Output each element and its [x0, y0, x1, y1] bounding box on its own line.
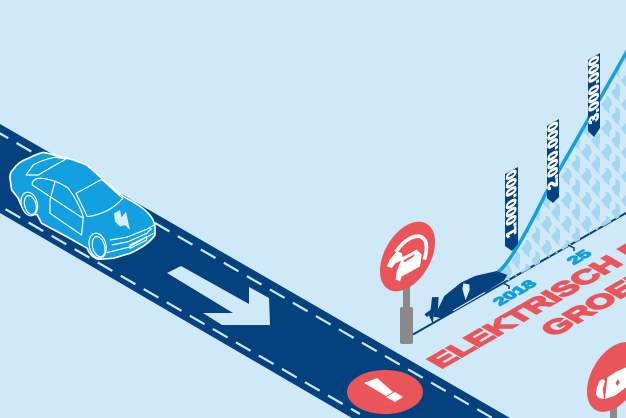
road [0, 124, 520, 418]
flag: 2.000.000: 2.000.000 [545, 118, 561, 193]
charging car silhouette [426, 271, 507, 318]
sign: electric car [369, 212, 446, 301]
year label 25: 25 [562, 247, 596, 267]
car bolt [114, 210, 130, 230]
sign post [400, 285, 413, 344]
flag: 3.000.000: 3.000.000 [586, 52, 602, 127]
axis tick 25 [568, 245, 574, 251]
growth area chart [498, 46, 626, 281]
arrow on road [167, 266, 270, 325]
chart baseline [413, 205, 626, 334]
car windows and details [18, 157, 154, 260]
car body [10, 152, 155, 259]
year label 2018: 2018 [488, 277, 541, 308]
axis tick 2018 [503, 283, 509, 289]
sign: charging hand [576, 333, 626, 418]
flag: 1.000.000: 1.000.000 [504, 166, 520, 241]
warning marker on road [347, 370, 423, 414]
electric car [10, 152, 155, 260]
